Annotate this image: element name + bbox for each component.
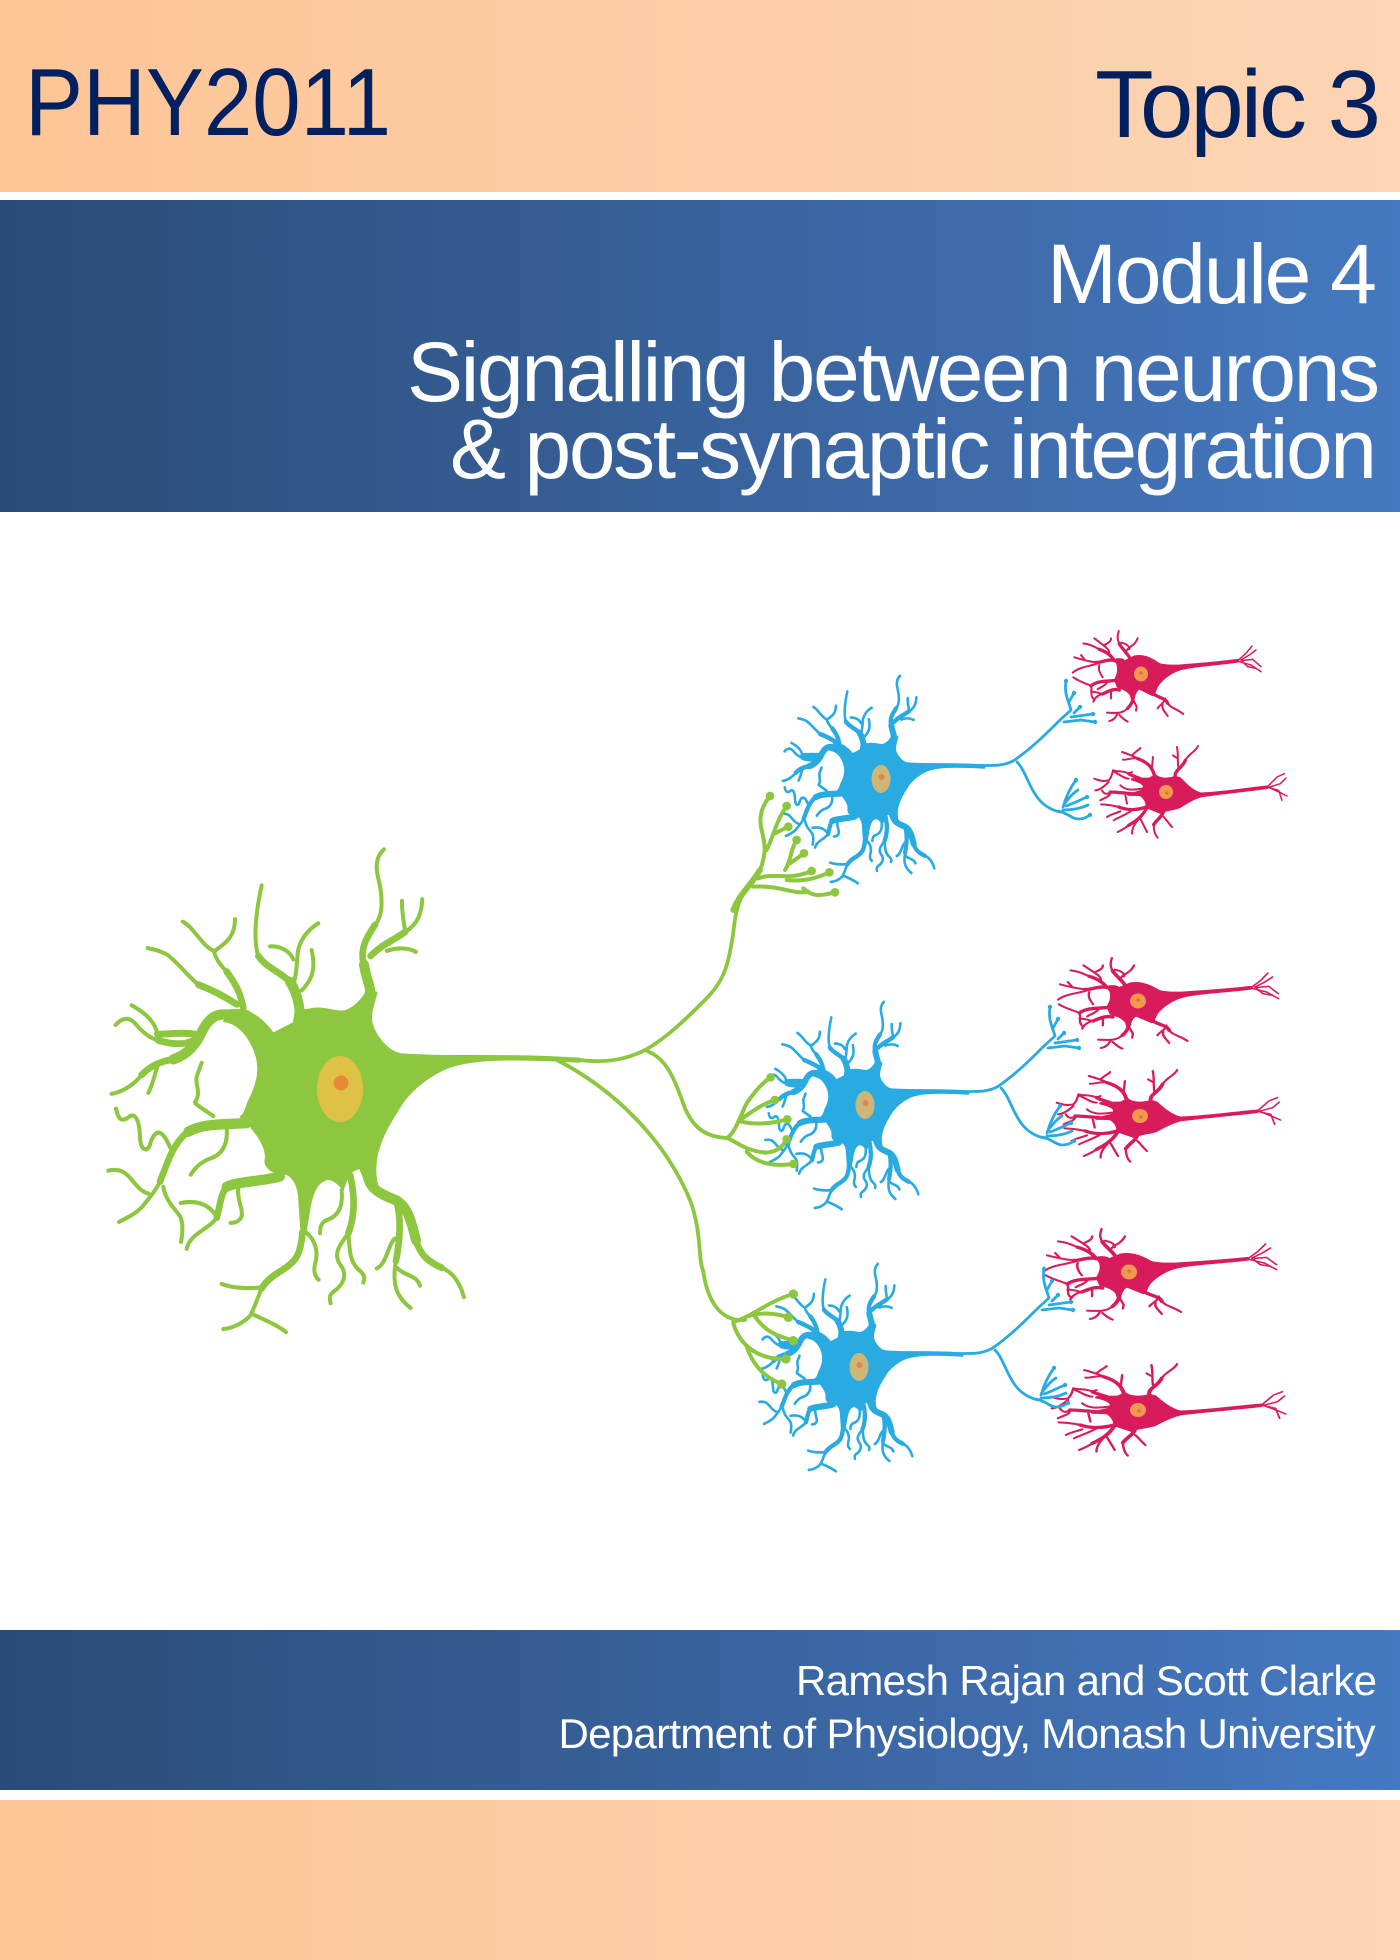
- blue neuron: top: [781, 676, 1097, 883]
- department: Department of Physiology, Monash University: [558, 1710, 1376, 1757]
- red nucleus: [1130, 994, 1146, 1008]
- terminal: bottom: [733, 1289, 798, 1389]
- title banner: [0, 200, 1400, 512]
- green neuron: [108, 849, 580, 1332]
- green nucleolus: [334, 1076, 348, 1090]
- course code: PHY2011: [25, 49, 391, 156]
- red neuron: top group upper: [1073, 631, 1261, 722]
- top band: [0, 0, 1400, 192]
- blue neuron: bottom: [759, 1264, 1075, 1471]
- red neuron: middle group lower: [1057, 1070, 1280, 1162]
- red nucleus: [1134, 666, 1148, 682]
- bottom band: [0, 1800, 1400, 1960]
- title line 2: & post-synaptic integration: [450, 402, 1377, 496]
- red nucleus: [1121, 1264, 1137, 1280]
- red nucleus: [1159, 785, 1173, 799]
- red neuron: bottom group lower: [1050, 1364, 1286, 1456]
- red nucleus: [1132, 1109, 1148, 1123]
- green cell body and dendrites: [108, 849, 580, 1332]
- topic label: Topic 3: [1095, 51, 1381, 158]
- authors: Ramesh Rajan and Scott Clarke: [796, 1657, 1377, 1704]
- footer banner: [0, 1630, 1400, 1790]
- red neuron: top group lower: [1094, 746, 1287, 838]
- red neuron: middle group upper: [1058, 958, 1278, 1049]
- blue neuron: middle: [765, 1002, 1081, 1209]
- red nucleus: [1130, 1403, 1146, 1417]
- title line 1: Signalling between neurons: [407, 325, 1380, 419]
- green nucleus: [317, 1056, 363, 1122]
- module number: Module 4: [1047, 227, 1377, 321]
- terminal: top: [733, 792, 839, 910]
- terminal: middle: [727, 1073, 798, 1168]
- red neuron: bottom group upper: [1045, 1229, 1277, 1320]
- green axon branches: [557, 792, 839, 1389]
